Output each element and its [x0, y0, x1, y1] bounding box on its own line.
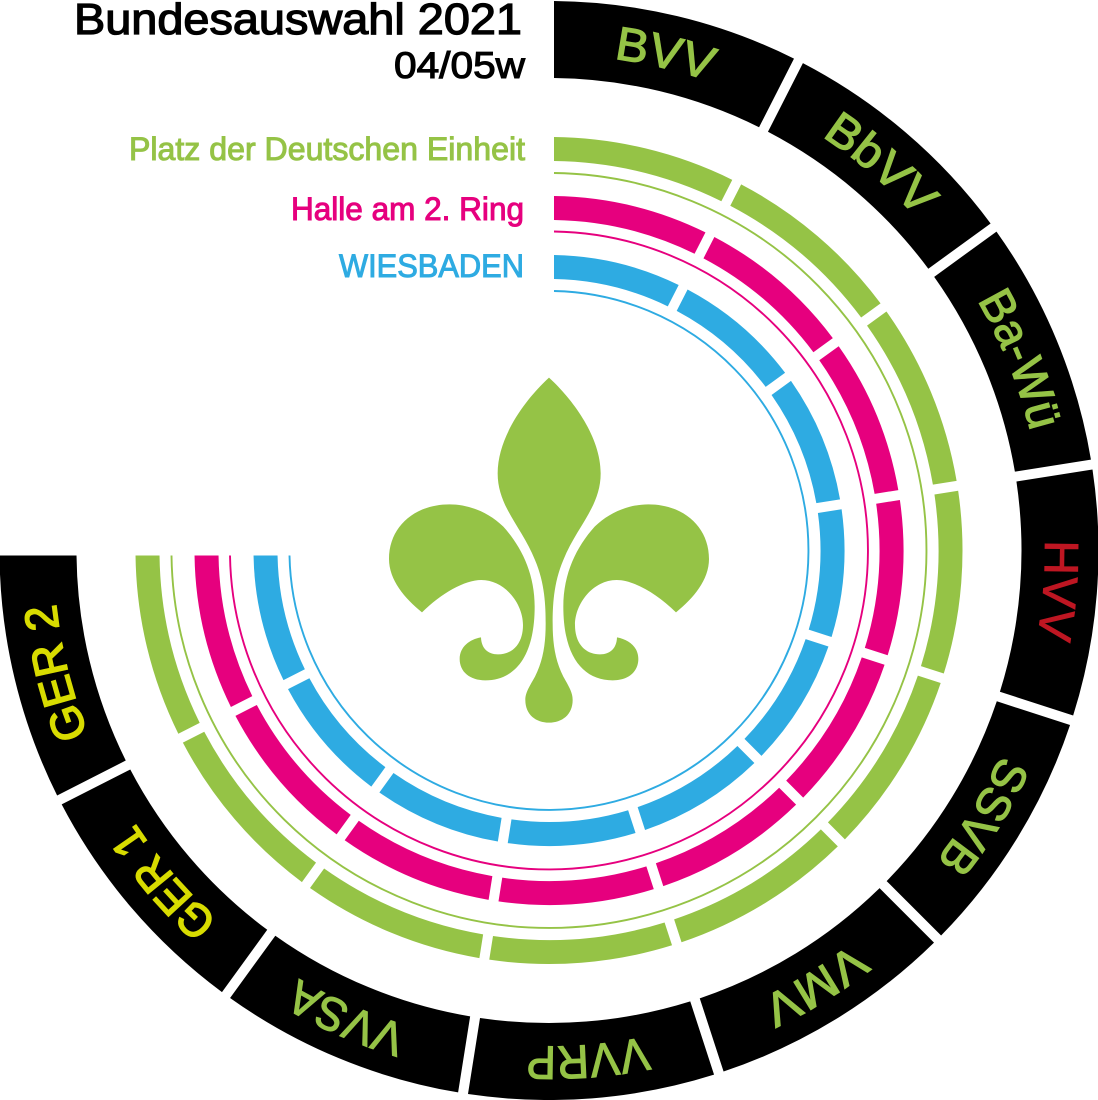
segment: VVSA: VVSA	[294, 978, 398, 1058]
segment: GER 2	[0, 556, 126, 796]
segment: GER 2: GER 2	[24, 605, 84, 740]
blue ring: Wiesbaden	[227, 255, 864, 872]
segment: BVV: BVV	[617, 26, 720, 78]
segment: GER 1: GER 1	[112, 824, 212, 937]
icon: fleur-de-lis	[389, 378, 709, 723]
legend: Platz der Deutschen Einheit: Platz der Deutschen Einheit	[129, 131, 525, 167]
segment: SSVB	[886, 701, 1070, 936]
green ring: Platz der Deutschen Einheit	[97, 137, 991, 1000]
magenta ring: Halle am 2. Ring	[162, 196, 928, 936]
segment: Ba-Wü	[934, 232, 1091, 472]
legend: Wiesbaden: WIESBADEN	[339, 248, 524, 284]
segment: Ba-Wü: Ba-Wü	[978, 287, 1061, 430]
segment: VMV	[700, 888, 934, 1072]
segment: SSVB: SSVB	[941, 759, 1026, 874]
legend: Halle am 2. Ring: Halle am 2. Ring	[291, 191, 524, 227]
segment: VVRP: VVRP	[528, 1038, 652, 1080]
segment: HVV	[1000, 470, 1098, 716]
segment: BbVV	[768, 63, 990, 269]
segment: GER 1	[62, 770, 268, 992]
segment: HVV: HVV	[1038, 544, 1078, 644]
segment: BbVV: BbVV	[824, 111, 942, 208]
segment: BVV	[554, 1, 794, 128]
subtitle: age group: 04/05w	[394, 45, 525, 86]
segment: VVSA	[230, 936, 470, 1092]
segment: VMV: VMV	[772, 950, 872, 1029]
segment: VVRP	[468, 1001, 714, 1100]
